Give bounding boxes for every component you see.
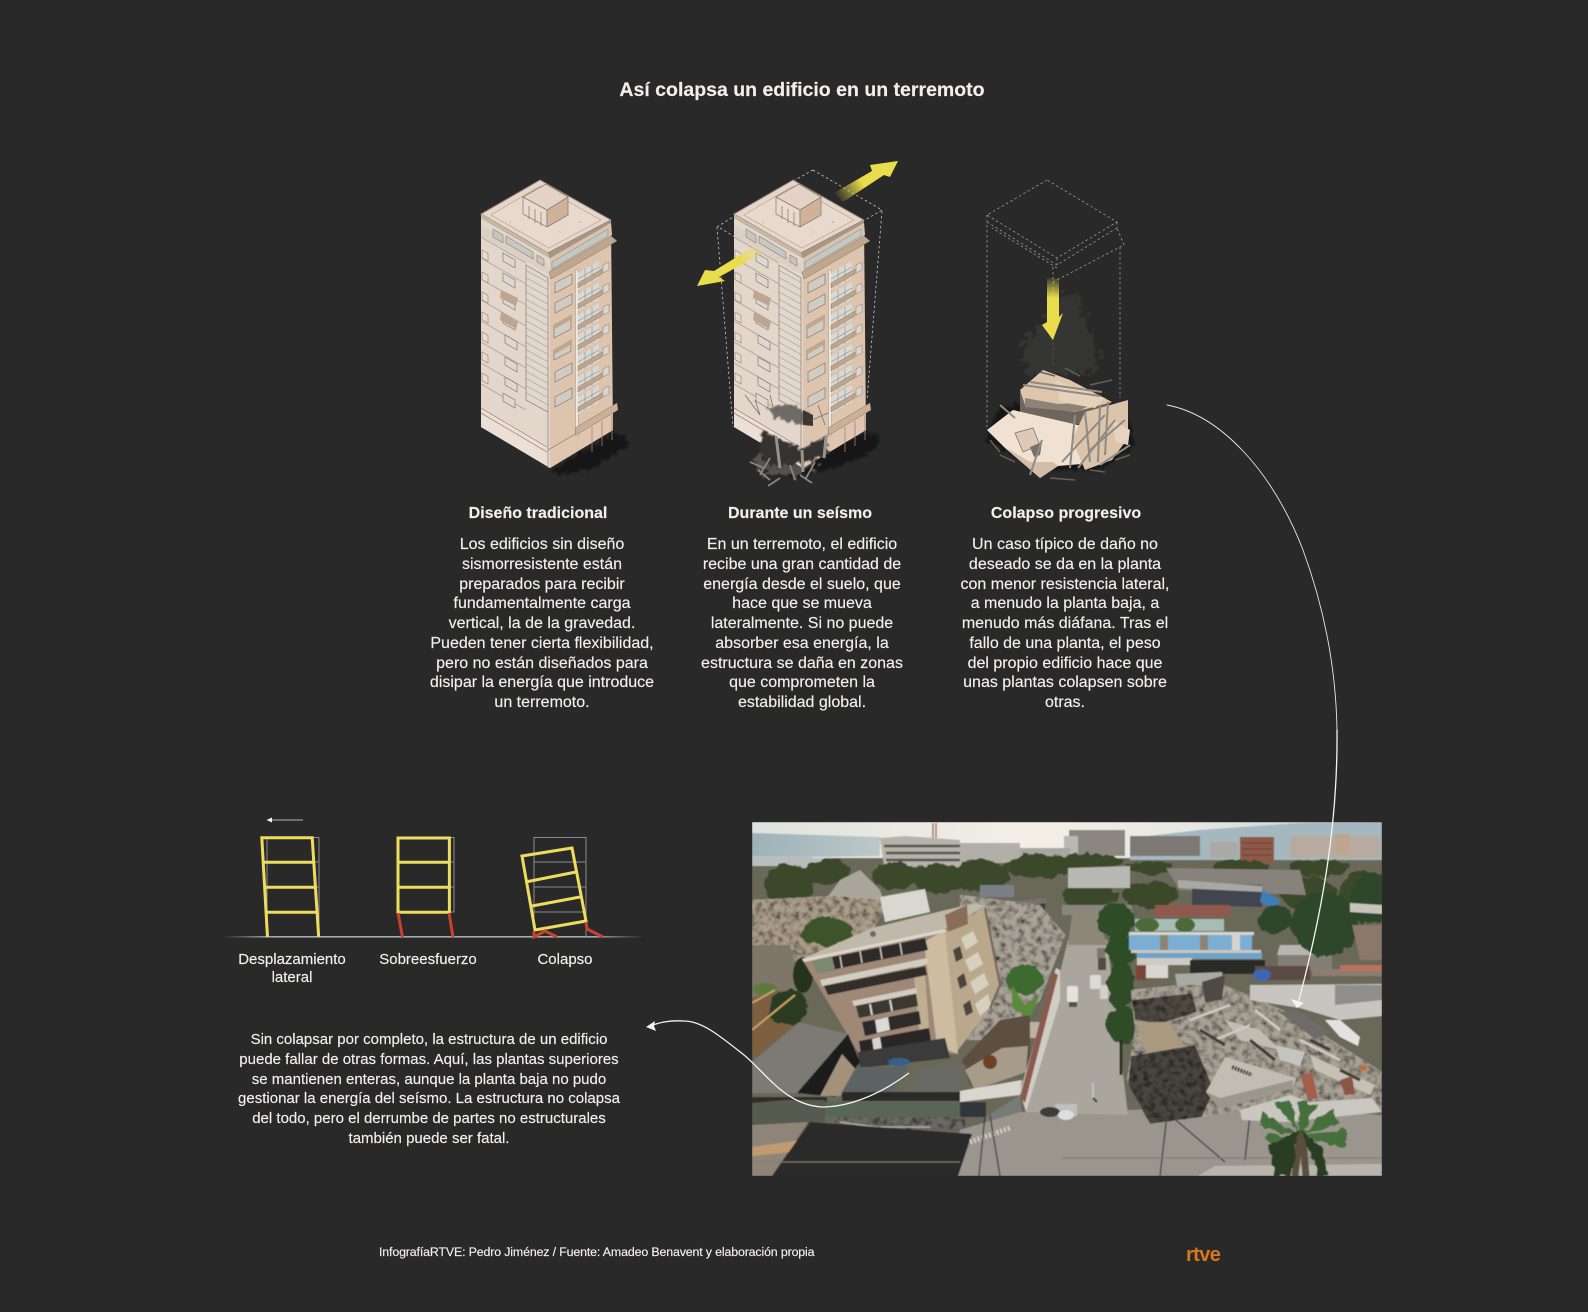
body text xyxy=(960,536,1169,711)
sheds and front wall xyxy=(752,1022,1022,1135)
label: sobreesfuerzo: Sobreesfuerzo xyxy=(379,951,477,968)
arrowhead xyxy=(1291,999,1304,1008)
photo: collapsed buildings xyxy=(752,822,1392,1176)
arrowhead xyxy=(646,1021,656,1031)
credits: InfografíaRTVE: Pedro Jiménez / Fuente: Amadeo Benavent y elaboración propia xyxy=(379,1245,814,1259)
text block: partial failure explanation xyxy=(238,1031,620,1147)
body text: fundamentalmente carga xyxy=(454,595,630,612)
text column: colapso progresivo xyxy=(960,505,1169,711)
heading: Durante un seísmo xyxy=(728,505,872,522)
ground shadow and rubble xyxy=(755,432,878,478)
front façade xyxy=(802,928,955,1054)
body text: estructura se daña en zonas xyxy=(701,654,903,672)
midground structures xyxy=(828,865,1306,918)
roadside palms xyxy=(1097,903,1140,1043)
right face xyxy=(945,909,1000,1054)
frame: collapse xyxy=(522,838,603,937)
body text: pero no están diseñados para xyxy=(436,654,648,672)
body text: disipar la energía que introduce xyxy=(430,674,654,691)
text block: partial failure explanation: Sin colapsar por completo, la estructura de un edificio xyxy=(251,1031,607,1048)
label: desplazamiento lateral: Desplazamiento xyxy=(238,951,346,968)
curved arrow: collapse to photo xyxy=(1167,405,1337,1008)
body text: unas plantas colapsen sobre xyxy=(963,674,1167,691)
text block: partial failure explanation: se mantienen enteras, aunque la planta baja no pudo xyxy=(252,1070,606,1088)
text column: diseño tradicional xyxy=(430,505,654,711)
structural diagrams xyxy=(223,818,643,938)
dashed displaced outline xyxy=(717,170,882,427)
window rows xyxy=(813,938,928,973)
body text: Un caso típico de daño no xyxy=(972,536,1158,553)
roof xyxy=(802,903,985,959)
body text xyxy=(701,536,903,711)
label: desplazamiento lateral: lateral xyxy=(272,969,312,986)
body text: energía desde el suelo, que xyxy=(703,576,901,592)
text block: partial failure explanation: puede fallar de otras formas. Aquí, las plantas superiores xyxy=(239,1051,619,1068)
body text: Los edificios sin diseño xyxy=(460,536,624,553)
body text: estabilidad global. xyxy=(738,694,866,711)
motel block xyxy=(1129,918,1382,992)
illustration: traditional building xyxy=(481,180,628,475)
body text: del propio edificio hace que xyxy=(968,654,1162,672)
body text: Pueden tener cierta flexibilidad, xyxy=(430,635,654,652)
curved arrow: photo to text xyxy=(646,1021,909,1107)
rubble pile xyxy=(985,368,1135,480)
body text: menudo más diáfana. Tras el xyxy=(962,615,1168,632)
illustration: building during earthquake xyxy=(697,161,898,486)
arrow: lateral movement front left xyxy=(697,247,763,286)
body text: con menor resistencia lateral, xyxy=(960,576,1169,592)
arrow: falling xyxy=(1042,278,1063,340)
body text: preparados para recibir xyxy=(459,576,625,592)
left debris field xyxy=(752,896,884,962)
body text: a menudo la planta baja, a xyxy=(971,595,1159,612)
frame: overstress xyxy=(398,838,454,937)
label: colapso: Colapso xyxy=(537,951,593,968)
skyline xyxy=(752,823,1380,868)
text column: durante un seísmo xyxy=(701,505,903,711)
isometric building xyxy=(481,180,618,468)
text block: partial failure explanation: gestionar la energía del seísmo. La estructura no colapsa xyxy=(238,1090,620,1107)
dashed ghost of building xyxy=(987,180,1124,427)
ground line xyxy=(223,936,643,938)
frame: lateral displacement xyxy=(262,838,319,937)
body text: En un terremoto, el edificio xyxy=(707,536,897,553)
debris right of tilted building xyxy=(960,895,1065,1040)
logo: rtve: rtve xyxy=(1186,1244,1220,1266)
rubble mounds xyxy=(1127,985,1382,1122)
body text: sismorresistente están xyxy=(462,556,622,573)
text block: partial failure explanation: del todo, pero el derrumbe de partes no estructurales xyxy=(252,1110,606,1127)
foreground palm xyxy=(1260,1100,1346,1176)
body text: que comprometen la xyxy=(729,674,875,691)
main road xyxy=(1020,915,1128,1120)
body text: otras. xyxy=(1045,694,1085,711)
large trees right xyxy=(1258,872,1392,956)
shaking building xyxy=(734,180,871,468)
body text: lateralmente. Si no puede xyxy=(711,615,893,632)
cream corner column xyxy=(924,930,958,1054)
text block: partial failure explanation: también puede ser fatal. xyxy=(349,1130,509,1147)
background trees xyxy=(764,851,1368,910)
body text: absorber esa energía, la xyxy=(715,635,889,652)
body text: hace que se mueva xyxy=(732,595,872,612)
heading: Colapso progresivo xyxy=(991,505,1141,522)
sky xyxy=(752,822,1382,858)
building shadow xyxy=(552,434,628,475)
rooftop box xyxy=(880,889,930,922)
heading: Diseño tradicional xyxy=(469,505,607,522)
dust cloud xyxy=(1020,295,1098,378)
label: desplazamiento lateral xyxy=(238,951,346,986)
wall, shed and boat xyxy=(1250,984,1382,1046)
soft storey damage xyxy=(745,395,828,486)
arrow: lateral movement back right xyxy=(834,161,898,202)
lower street xyxy=(752,1105,1382,1176)
body text: fallo de una planta, el peso xyxy=(969,635,1161,652)
tilted building xyxy=(802,889,1000,1068)
body text xyxy=(430,536,654,711)
title: Así colapsa un edificio en un terremoto xyxy=(619,79,985,101)
body text: vertical, la de la gravedad. xyxy=(449,615,635,632)
small displacement arrow xyxy=(266,818,303,822)
illustration: progressive collapse xyxy=(985,180,1135,480)
body text: deseado se da en la planta xyxy=(969,556,1161,573)
body text: recibe una gran cantidad de xyxy=(703,556,901,573)
body text: un terremoto. xyxy=(494,694,590,711)
